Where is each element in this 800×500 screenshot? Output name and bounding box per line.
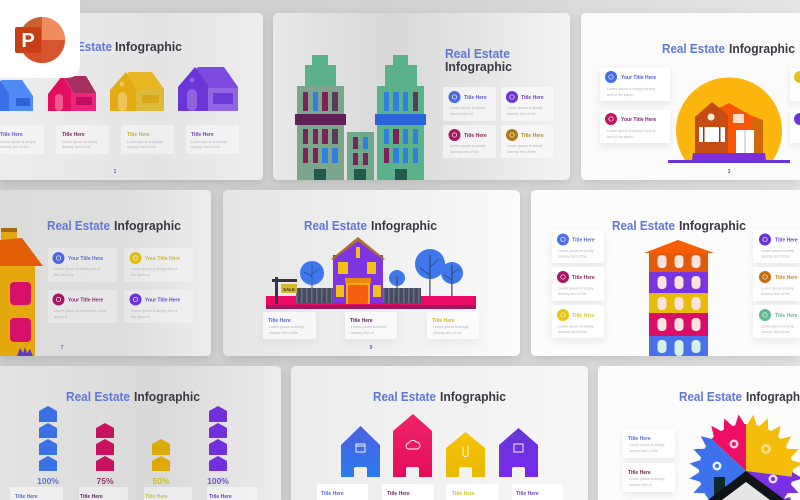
slide 6 title: Infographic [679, 218, 746, 233]
cards: slide 7: Title Here [209, 494, 232, 500]
cards: slide 6 left [552, 230, 604, 338]
slide 4 title [47, 218, 181, 233]
slide 6: coloured apartment block [531, 190, 800, 356]
cards: slide 4: Lorem ipsum is simply text of [131, 309, 177, 313]
stack: purple 100% [209, 406, 227, 471]
slide 7 title [66, 389, 200, 404]
cards: slide 2: Lorem ipsum is simply [450, 106, 486, 110]
slide 1 title: Estate [77, 39, 112, 54]
cards: slide 3: Lorem ipsum is simply dummy [607, 129, 656, 133]
cards: slide 3: Lorem ipsum is simply dummy [607, 87, 656, 91]
house: purple [178, 67, 238, 111]
slide 5 title: Infographic [371, 218, 437, 233]
cards: slide 6 left: dummy text of the [558, 330, 587, 334]
platform [668, 153, 790, 163]
cards: slide 1: Title Here [62, 132, 85, 138]
cards: slide 4 [48, 248, 193, 323]
cards: slide 5: Lorem ipsum is simply [433, 325, 469, 329]
cards: slide 4: the ipsum is [131, 273, 150, 277]
percentages: 50% [152, 476, 170, 486]
house: pink [48, 76, 96, 111]
cards: slide 1: dummy text of the [191, 145, 220, 149]
cards: slide 2: dummy text of [450, 112, 473, 116]
cards: slide 3: Your Title Here [621, 117, 656, 123]
percentages: 100% [37, 476, 59, 486]
cards: slide 2: Title Here [464, 133, 487, 139]
cards: slide 5: Title Here [268, 318, 291, 324]
cards: slide 1: Lorem ipsum is simply [191, 140, 227, 144]
cards: slide 1 [0, 125, 239, 154]
slide 8 title [373, 389, 506, 404]
cards: slide 5: Title Here [432, 318, 455, 324]
slide 4 title: Real Estate [47, 218, 110, 233]
cards: slide 7: Title Here [80, 494, 103, 500]
sun [676, 77, 782, 160]
right tower [375, 55, 426, 180]
percentages [37, 476, 229, 486]
cards: slide 6 right: dummy text of the [761, 292, 790, 296]
cards: slide 2: Lorem ipsum is simply [507, 106, 543, 110]
cards: slide 6 right: Lorem ipsum is simp [761, 286, 794, 290]
cards: slide 5 [263, 312, 479, 339]
cards: slide 4: ipsum is [54, 315, 67, 319]
cards: slide 1: Title Here [127, 132, 150, 138]
slide 2: towers [273, 13, 570, 180]
trees [300, 249, 463, 297]
cards: slide 5: Title Here [350, 318, 373, 324]
cards: slide 9: Lorem ipsum is simply [629, 477, 665, 481]
cards: slide 2: dummy text of the [507, 150, 536, 154]
cards: slide 2: Title Here [521, 95, 544, 101]
cards: slide 6 right: Lorem ipsum is simp [761, 324, 794, 328]
slide 3: house in sun [581, 13, 800, 180]
cards: slide 2 [443, 87, 553, 158]
cards: slide 2: dummy text of the [507, 112, 536, 116]
cards: slide 6 right [753, 230, 800, 338]
slide 8 title: Infographic [440, 389, 506, 404]
left tower [295, 55, 346, 180]
cards: slide 1: Title Here [191, 132, 214, 138]
slide 1: four houses [0, 13, 263, 180]
stack: yellow 50% [152, 439, 170, 471]
slide 1 title [77, 39, 182, 54]
cards: slide 5: dummy text of [351, 331, 374, 335]
slide 4: yellow townhouse [0, 190, 211, 356]
slide 1 title: Infographic [115, 39, 182, 54]
for sale sign [272, 277, 297, 304]
ground [266, 296, 476, 309]
page number 3: 3 [728, 169, 731, 175]
cards: slide 6 left: Title Here [572, 275, 595, 281]
wheel segment: blue [689, 432, 746, 500]
cards: slide 8 [317, 484, 563, 500]
slide 4 title: Infographic [114, 218, 181, 233]
slide 7 title: Infographic [134, 389, 200, 404]
cards: slide 1: Lorem ipsum is simply [127, 140, 163, 144]
cards: slide 6 right: Lorem ipsum is simp [761, 249, 794, 253]
PowerPoint logo badge [0, 0, 80, 78]
slide 5 title [304, 218, 437, 233]
slide 5: street scene [223, 190, 520, 356]
cards: slide 6 left: Lorem ipsum is simply [558, 286, 594, 290]
cards: slide 6 right: Title Here [775, 313, 798, 319]
cards: slide 4: Your Title Here [145, 256, 180, 262]
cards: slide 1: Lorem ipsum is simply [62, 140, 98, 144]
cards: slide 9: Lorem ipsum is simply [629, 443, 665, 447]
fence [296, 288, 421, 303]
house: blue [0, 80, 33, 111]
cards: slide 4: Your Title Here [68, 298, 103, 304]
cards: slide 1: dummy text of the [62, 145, 91, 149]
cards: slide 9: dummy text of [629, 483, 652, 487]
slide 6 title: Real Estate [612, 218, 675, 233]
for sale sign: SALE [283, 287, 295, 292]
cards: slide 4: the ipsum is [131, 315, 150, 319]
slide 2 title: Real Estate [445, 46, 510, 61]
wheel segment: yellow [746, 414, 800, 477]
stack: blue 100% [39, 406, 57, 471]
cards: slide 6 right: Title Here [775, 275, 798, 281]
cards: slide 8: Title Here [321, 491, 344, 497]
cards: slide 4: Lorem ipsum is simply text of [54, 267, 100, 271]
percentages: 100% [207, 476, 229, 486]
purple house [331, 237, 385, 304]
cards: slide 3: Your Title Here [621, 75, 656, 81]
house illustration [695, 102, 763, 153]
apartment building [644, 240, 714, 356]
cards: slide 6 left: Title Here [572, 313, 595, 319]
wheel chart [689, 414, 800, 500]
cards: slide 7: Title Here [145, 494, 168, 500]
cards: slide 5: Lorem ipsum is simply [269, 325, 305, 329]
cards: slide 7 [10, 487, 257, 500]
cards: slide 8: Title Here [452, 491, 475, 497]
cards: slide 7: Title Here [15, 494, 38, 500]
slide 9 title: Real Estate [679, 389, 742, 404]
wheel icons [712, 440, 778, 484]
cards: slide 9: Title Here [628, 470, 651, 476]
middle building [347, 132, 374, 180]
cards: slide 6 left: dummy text of the [558, 292, 587, 296]
cards: slide 1: Title Here [0, 132, 23, 138]
cards: slide 5: dummy text of the [269, 331, 298, 335]
icon: PowerPoint P: P [21, 30, 35, 52]
cards: slide 2: Title Here [521, 133, 544, 139]
yellow house [0, 228, 43, 356]
cards: slide 6 right: dummy text of the [761, 254, 790, 258]
cards: slide 2: Title Here [464, 95, 487, 101]
cards: slide 1: Lorem ipsum is simply [0, 140, 36, 144]
cards: slide 4: Your Title Here [68, 256, 103, 262]
slide 3 title [662, 41, 795, 56]
cards: slide 2: Lorem ipsum is simply [507, 144, 543, 148]
slide 2 title: Infographic [445, 59, 512, 74]
slide 6 title [612, 218, 746, 233]
house: purple with news icon [499, 428, 538, 477]
cards: slide 6 left: Lorem ipsum is simply [558, 249, 594, 253]
slide 5 title: Real Estate [304, 218, 367, 233]
house: yellow with paperclip icon [446, 432, 485, 477]
slide 9 title [679, 389, 800, 404]
cards: slide 1: dummy text of the [0, 145, 29, 149]
cards: slide 6 right: dummy text of the [761, 330, 790, 334]
wheel segment: pink [707, 414, 746, 471]
cards: slide 4: Lorem ipsum is simply text of [131, 267, 177, 271]
slide 7: stacked house percentages [0, 366, 281, 500]
percentages: 75% [96, 476, 114, 486]
cards: slide 4: the ipsum is [54, 273, 73, 277]
cards: slide 2: Lorem ipsum is simply [450, 144, 486, 148]
slide 3 title: Real Estate [662, 41, 725, 56]
cards: slide 1: dummy text of the [127, 145, 156, 149]
slide 8 title: Real Estate [373, 389, 436, 404]
page number 1: 1 [114, 169, 117, 175]
cards: slide 2: dummy text of the [450, 150, 479, 154]
cards: slide 8: Title Here [387, 491, 410, 497]
cards: slide 4: Lorem ipsum is simply text of the [54, 309, 106, 313]
cards: slide 4: Your Title Here [145, 298, 180, 304]
cards: slide 3: text of the ipsum [607, 93, 633, 97]
page number 7: 7 [61, 345, 64, 351]
house roof in wheel centre [708, 471, 785, 500]
cards: slide 9: dummy text of the [629, 449, 658, 453]
cards: slide 9: Title Here [628, 436, 651, 442]
stack: pink 75% [96, 423, 114, 471]
cards: slide 3 [600, 68, 800, 143]
slide 7 title: Real Estate [66, 389, 130, 404]
cards: slide 9 [623, 429, 675, 492]
house: pink with cloud icon [393, 414, 432, 477]
slide 2 title [445, 46, 512, 74]
house: blue with box icon [341, 426, 380, 477]
slide 8: four icon houses [291, 366, 588, 500]
slide 9: sawtooth wheel [598, 366, 800, 500]
cards: slide 5: dummy text of the [433, 331, 462, 335]
cards: slide 6 right: Title Here [775, 238, 798, 244]
house: yellow [110, 72, 164, 111]
wheel segment: purple [746, 471, 800, 500]
cards: slide 6 left: Lorem ipsum is simply [558, 324, 594, 328]
cards: slide 8: Title Here [516, 491, 539, 497]
cards: slide 6 left: dummy text of the [558, 254, 587, 258]
cards: slide 5: Lorem ipsum is simply [351, 325, 387, 329]
slide 3 title: Infographic [729, 41, 795, 56]
cards: slide 6 left: Title Here [572, 238, 595, 244]
page number 9: 9 [370, 345, 373, 351]
cards: slide 3: text of the ipsum [607, 135, 633, 139]
